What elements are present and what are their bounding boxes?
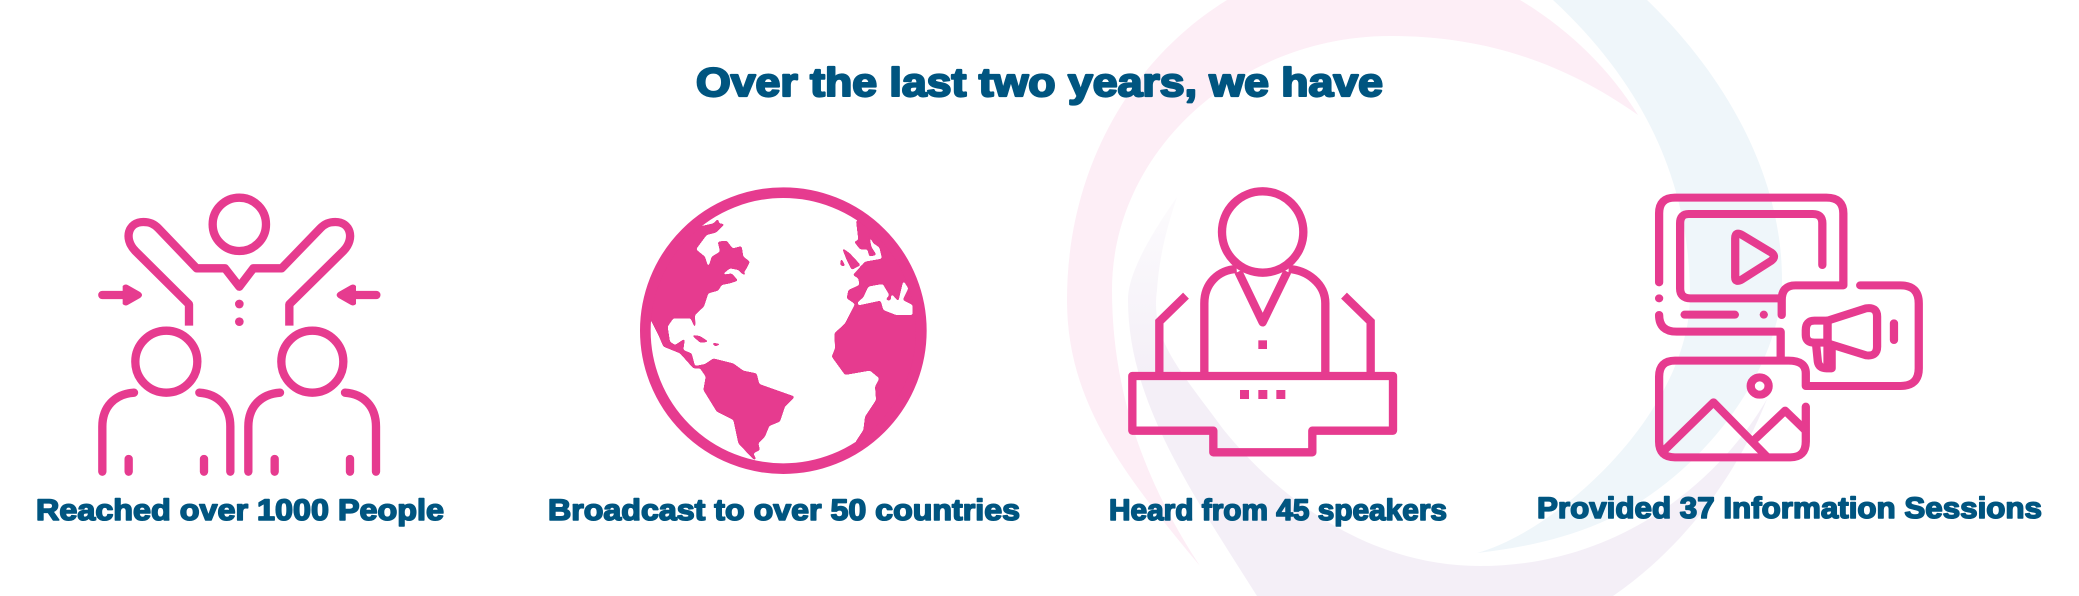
panel: speakers <box>1109 191 1447 527</box>
icon: media screens, megaphone and picture <box>1655 198 1919 457</box>
label: broadcast: Broadcast to over 50 countries <box>548 494 1020 527</box>
panel: people reached <box>36 198 444 527</box>
icon: speaker at podium <box>1132 191 1393 452</box>
panel: information sessions <box>1537 198 2042 525</box>
panel: broadcast countries <box>548 193 1020 527</box>
icon: globe <box>640 187 927 474</box>
label: reached: Reached over 1000 People <box>36 494 444 527</box>
background swirl watermark <box>1067 0 1782 596</box>
title: Over the last two years, we have <box>696 61 1383 105</box>
icon: three people with arrows <box>102 198 376 472</box>
label: sessions: Provided 37 Information Sessions <box>1537 492 2042 525</box>
label: speakers: Heard from 45 speakers <box>1109 494 1447 527</box>
